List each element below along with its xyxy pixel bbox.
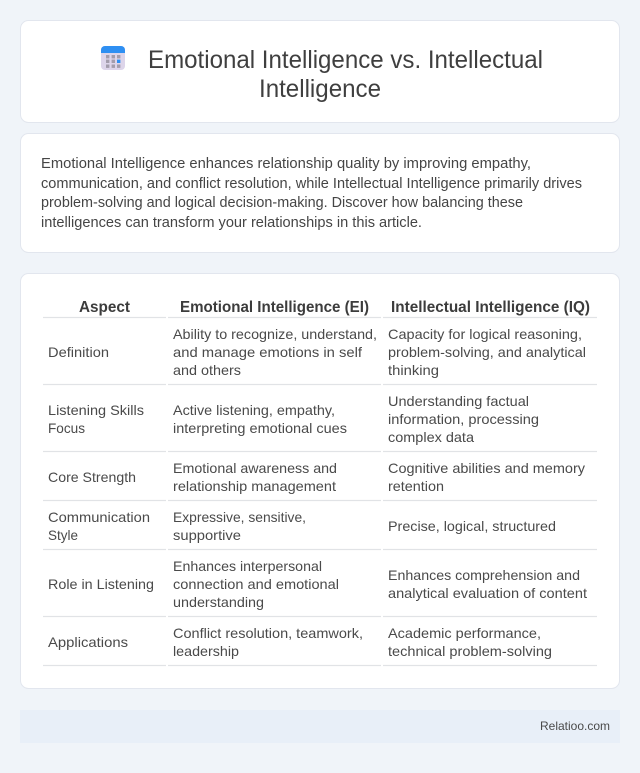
row: core strength bbox=[43, 460, 597, 500]
row: role in listening: Role in Listening bbox=[48, 576, 154, 592]
row: definition: problem-solving, and analytical bbox=[388, 344, 586, 360]
table header: Aspect bbox=[79, 299, 131, 316]
row: listening skills focus: Active listening, empathy, bbox=[173, 402, 335, 418]
row: definition: and manage emotions in self bbox=[173, 344, 362, 360]
row: listening skills focus: information, processing bbox=[388, 411, 539, 427]
row: role in listening: Enhances comprehension and bbox=[388, 567, 580, 583]
row: applications: Academic performance, bbox=[388, 625, 541, 641]
intro text: intelligences can transform your relationships in this article. bbox=[41, 215, 422, 231]
row: definition: Ability to recognize, understand, bbox=[173, 326, 377, 342]
title: Intelligence bbox=[259, 75, 381, 103]
table header: Intellectual Intelligence (IQ) bbox=[391, 299, 590, 316]
icon: calendar bbox=[101, 46, 125, 70]
row: definition: Capacity for logical reasoning, bbox=[388, 326, 582, 342]
table header bbox=[43, 299, 597, 318]
intro text bbox=[41, 156, 582, 231]
row: core strength: Emotional awareness and bbox=[173, 460, 337, 476]
row: applications bbox=[43, 625, 597, 666]
row: role in listening: Enhances interpersonal bbox=[173, 558, 322, 574]
table header: Emotional Intelligence (EI) bbox=[180, 299, 369, 316]
row: listening skills focus: complex data bbox=[388, 429, 474, 445]
title: Emotional Intelligence vs. Intellectual bbox=[148, 46, 543, 74]
row: definition bbox=[43, 326, 597, 384]
row: communication style bbox=[43, 509, 597, 550]
row: definition: Definition bbox=[48, 344, 109, 360]
row: listening skills focus: Listening Skills bbox=[48, 402, 144, 418]
row: definition: thinking bbox=[388, 362, 439, 378]
row: applications: Applications bbox=[48, 634, 128, 650]
row: communication style: Expressive, sensitive, bbox=[173, 509, 306, 525]
footer text: Relatioo.com bbox=[540, 719, 610, 733]
row: core strength: Core Strength bbox=[48, 469, 136, 485]
row: communication style: Precise, logical, structured bbox=[388, 518, 556, 534]
footer bar bbox=[20, 710, 620, 743]
row: listening skills focus: interpreting emotional cues bbox=[173, 420, 347, 436]
row: communication style: Communication bbox=[48, 509, 150, 525]
row: listening skills focus: Focus bbox=[48, 420, 85, 436]
panel: introduction bbox=[20, 134, 620, 252]
row: core strength: relationship management bbox=[173, 478, 336, 494]
row: role in listening: connection and emotional bbox=[173, 576, 339, 592]
row: applications: technical problem-solving bbox=[388, 643, 552, 659]
row: communication style: Style bbox=[48, 527, 78, 543]
row: applications: Conflict resolution, teamwork, bbox=[173, 625, 363, 641]
row: role in listening: analytical evaluation of content bbox=[388, 585, 587, 601]
row: core strength: Cognitive abilities and memory bbox=[388, 460, 585, 476]
intro text: communication, and conflict resolution, while Intellectual Intelligence primarily drives bbox=[41, 176, 582, 192]
row: core strength: retention bbox=[388, 478, 444, 494]
row: applications: leadership bbox=[173, 643, 239, 659]
row: communication style: supportive bbox=[173, 527, 241, 543]
title bbox=[148, 46, 543, 103]
intro text: Emotional Intelligence enhances relationship quality by improving empathy, bbox=[41, 156, 531, 172]
row: listening skills focus: Understanding factual bbox=[388, 393, 529, 409]
row: definition: and others bbox=[173, 362, 241, 378]
row: role in listening bbox=[43, 558, 597, 616]
panel: comparison table bbox=[20, 274, 620, 688]
row: role in listening: understanding bbox=[173, 594, 264, 610]
row: listening skills focus bbox=[43, 393, 597, 452]
panel: title card bbox=[20, 20, 620, 122]
intro text: problem-solving and logical decision-making. Discover how balancing these bbox=[41, 195, 523, 211]
